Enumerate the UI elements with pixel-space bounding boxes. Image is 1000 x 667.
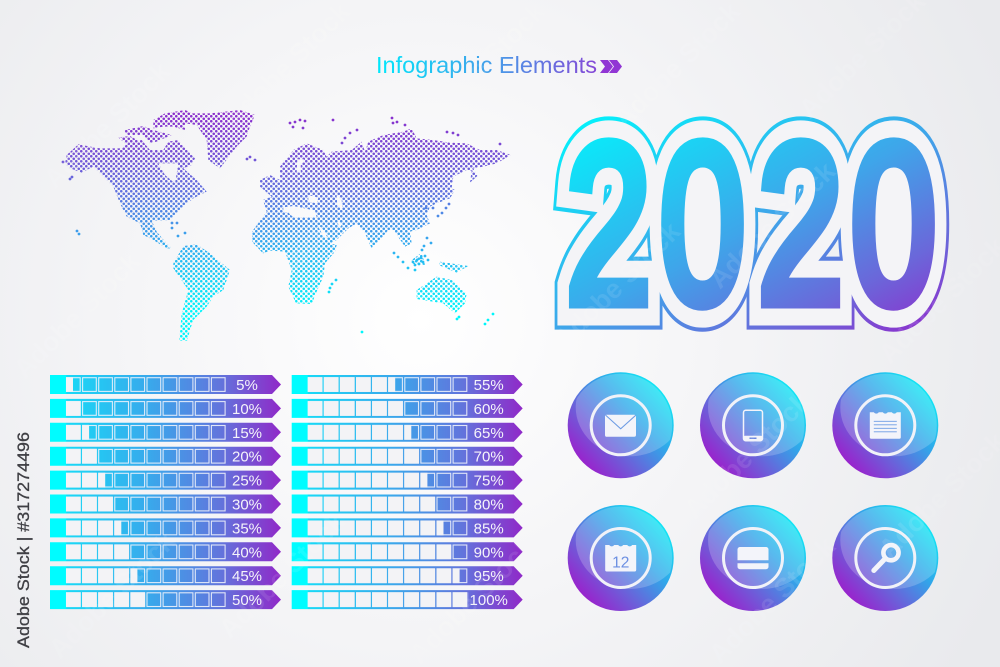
stock watermark overlay: Adobe Stock — [38, 56, 177, 194]
bar 35%: 35% — [232, 520, 262, 537]
stock watermark overlay: Adobe Stock — [218, 0, 357, 134]
bar 45%: 45% — [232, 568, 262, 585]
bar 25%: 25% — [232, 473, 262, 490]
stock watermark overlay: Adobe Stock — [403, 531, 542, 667]
icon: calendar badge: 12 — [612, 554, 629, 572]
bar 60% — [292, 399, 523, 418]
bar 10% — [50, 399, 281, 418]
title: Infographic Elements — [376, 52, 597, 78]
bar 25% — [50, 471, 281, 490]
bar 75%: 75% — [474, 473, 504, 490]
bar 100%: 100% — [470, 592, 508, 609]
bar 90% — [292, 542, 523, 561]
bar 10%: 10% — [232, 401, 262, 418]
stock watermark overlay: Adobe Stock — [678, 386, 817, 524]
icon: smartphone badge — [700, 358, 816, 478]
bar 75% — [292, 471, 523, 490]
bar 40% — [50, 542, 281, 561]
bar 40%: 40% — [232, 544, 262, 561]
stock watermark overlay: Adobe Stock — [608, 0, 747, 134]
progress bars: right column — [292, 375, 523, 609]
stock watermark overlay: Adobe Stock — [703, 531, 842, 667]
icon: calendar badge — [568, 491, 684, 611]
stock watermark overlay: Adobe Stock — [548, 216, 687, 354]
icon: magnifier badge — [832, 491, 948, 611]
stock watermark overlay: Adobe Stock — [703, 156, 842, 294]
bar 85%: 85% — [474, 520, 504, 537]
bar 50% — [50, 590, 281, 609]
bar 85% — [292, 518, 523, 537]
bar 45% — [50, 566, 281, 585]
bar 55%: 55% — [474, 377, 504, 394]
bar 5%: 5% — [236, 377, 258, 394]
bar 30%: 30% — [232, 496, 262, 514]
stock watermark overlay: Adobe Stock — [213, 506, 352, 644]
bar 35% — [50, 518, 281, 537]
icon: mail badge — [568, 358, 684, 478]
2020 outlined numerals — [566, 98, 936, 349]
stock watermark overlay: Adobe Stock — [8, 246, 147, 384]
stock watermark overlay: Adobe Stock — [198, 216, 337, 354]
bar 70% — [292, 447, 523, 466]
bar 5% — [50, 375, 281, 394]
bar 55% — [292, 375, 523, 394]
bar 65%: 65% — [474, 425, 504, 442]
bar 90%: 90% — [474, 544, 504, 561]
bar 15%: 15% — [232, 425, 262, 442]
stock id vertical label: Adobe Stock | #317274496 — [14, 432, 33, 648]
bar 15% — [50, 423, 281, 442]
bar 100% — [292, 590, 523, 609]
bar 95%: 95% — [474, 568, 504, 585]
bar 95% — [292, 566, 523, 585]
bar 60%: 60% — [474, 401, 504, 418]
progress bars: left column — [50, 375, 281, 609]
bar 20% — [50, 447, 281, 466]
bar 30% — [50, 494, 281, 514]
stock watermark overlay: Adobe Stock — [43, 526, 182, 664]
icon: credit card badge — [700, 491, 816, 611]
stock watermark overlay: Adobe Stock — [413, 0, 552, 134]
bar 50%: 50% — [232, 592, 262, 609]
bar 70%: 70% — [474, 449, 504, 466]
dotted world map — [62, 110, 510, 341]
icon: double chevron — [600, 60, 622, 73]
icon: notepad badge — [832, 358, 948, 478]
stock watermark overlay: Adobe Stock — [393, 196, 532, 334]
bar 20%: 20% — [232, 449, 262, 466]
bar 80%: 80% — [474, 496, 504, 514]
bar 80% — [292, 494, 523, 514]
bar 65% — [292, 423, 523, 442]
